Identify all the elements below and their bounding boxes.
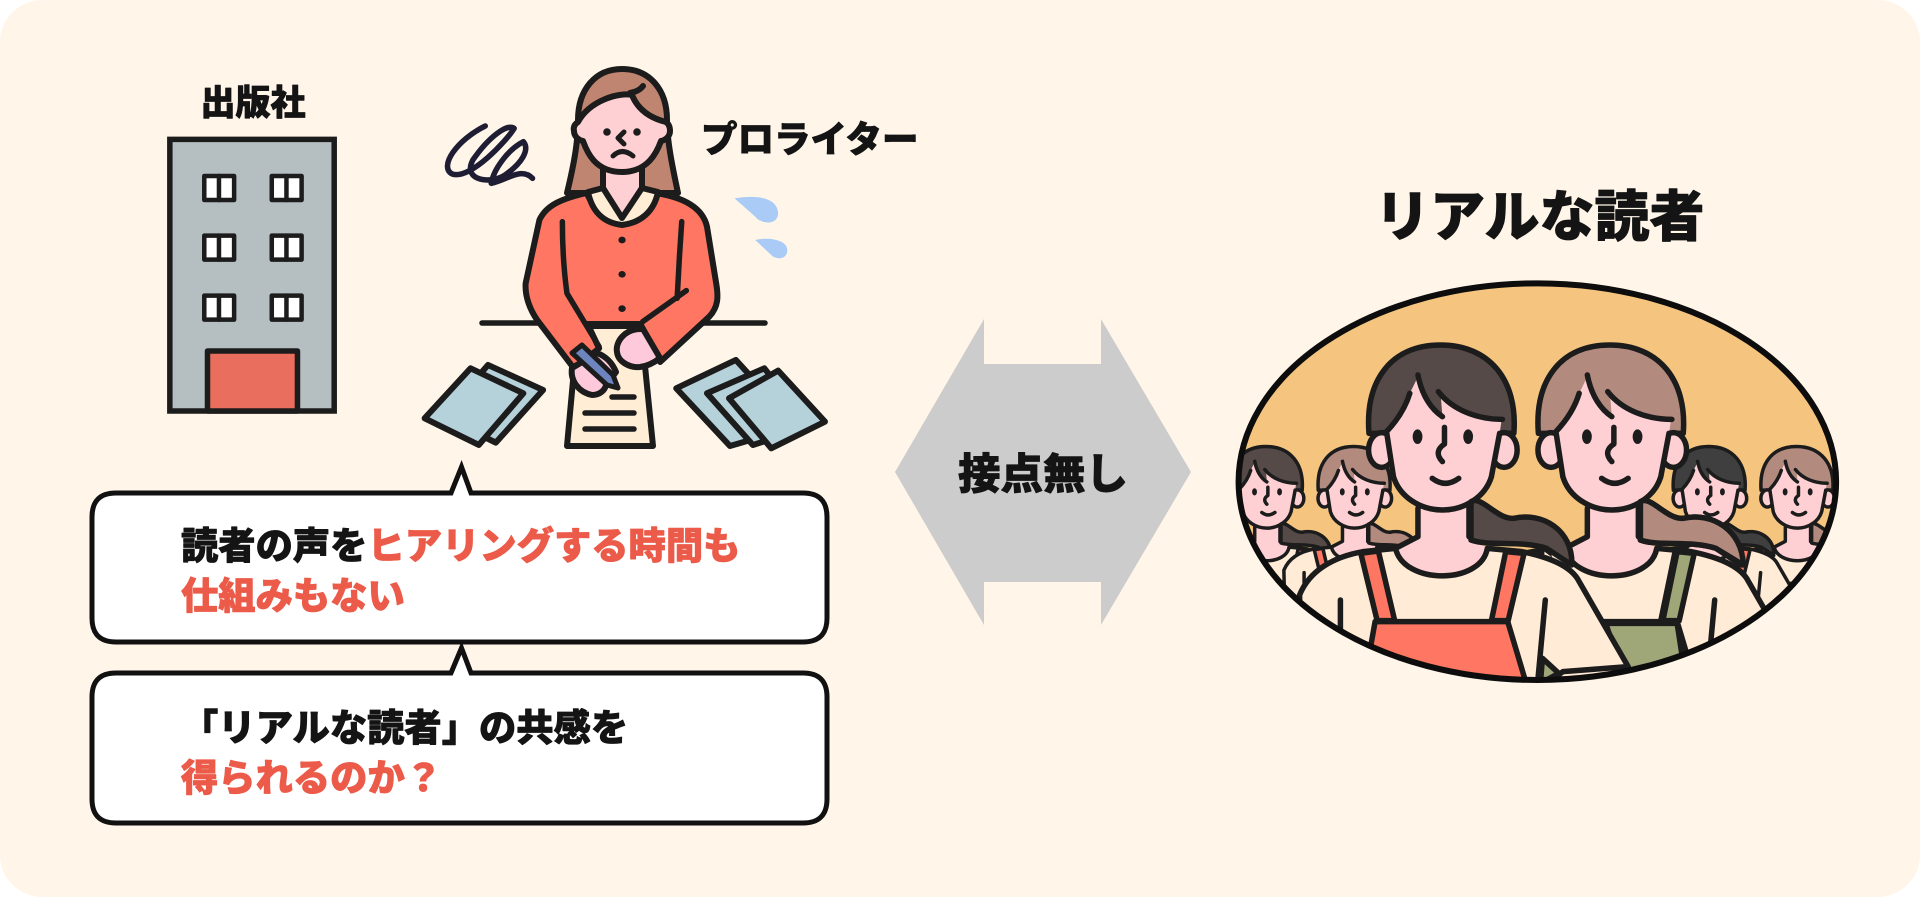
publisher label: 出版社 xyxy=(200,84,306,123)
illustration: group of real readers xyxy=(1236,280,1840,683)
reader: brown-haired woman xyxy=(1526,342,1766,676)
pro writer label: プロライター xyxy=(701,119,919,160)
icon: scribble of frustration xyxy=(448,126,533,183)
icon: sweat drops xyxy=(735,197,787,258)
arrow: no contact double arrow xyxy=(895,319,1191,625)
icon: right stack of papers xyxy=(676,360,825,448)
icon: publisher building xyxy=(170,139,334,411)
icon: left stack of papers xyxy=(425,365,543,445)
callout: no time to hear readers xyxy=(92,467,827,642)
callout: no time to hear readers: 読者の声をヒアリングする時間も xyxy=(181,525,740,567)
callout: can it win real readers' empathy: 得られるのか？ xyxy=(181,757,442,799)
callout: can it win real readers' empathy: 「リアルな読者」の共感を xyxy=(181,707,628,749)
no contact label: 接点無し xyxy=(958,452,1128,499)
icon: writer at desk xyxy=(425,69,825,448)
heading: real readers: リアルな読者 xyxy=(1375,186,1704,248)
callout: no time to hear readers: 仕組みもない xyxy=(181,575,405,617)
callout: can it win real readers' empathy xyxy=(92,648,827,823)
reader: dark-haired woman xyxy=(1300,345,1628,690)
